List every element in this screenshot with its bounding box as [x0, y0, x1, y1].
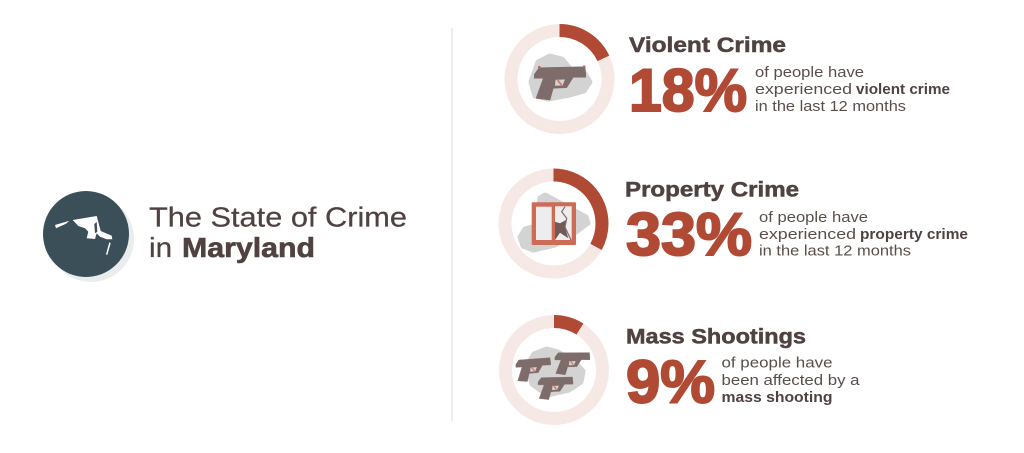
description: mass shooting — [722, 390, 832, 406]
panel: property crime — [505, 175, 968, 272]
description: of people have — [755, 65, 864, 81]
description: of people have — [759, 210, 868, 226]
icon: Maryland map badge — [43, 191, 134, 282]
panel: mass shootings — [506, 322, 861, 418]
icon: three handguns — [516, 349, 590, 400]
description — [722, 356, 861, 406]
donut chart: 9% — [506, 322, 602, 418]
description: in the last 12 months — [755, 99, 906, 115]
panel: title block — [43, 191, 407, 282]
stat: 18%: 18% — [629, 57, 747, 124]
donut chart: 33% — [505, 175, 602, 272]
description: experienced — [759, 227, 856, 243]
icon: handgun — [531, 56, 590, 100]
description: property crime — [860, 227, 968, 243]
heading: in Maryland: Maryland — [182, 232, 315, 263]
description: of people have — [722, 356, 832, 372]
heading: in Maryland: in — [149, 232, 172, 263]
description: been affected by a — [722, 373, 861, 389]
heading: Property Crime: Property Crime — [625, 178, 799, 202]
description — [755, 65, 950, 115]
description: experienced — [755, 82, 852, 98]
heading: The State of Crime: The State of Crime — [149, 202, 407, 232]
heading: Mass Shootings: Mass Shootings — [626, 326, 806, 348]
description: in the last 12 months — [759, 244, 911, 260]
stat: 33%: 33% — [626, 201, 752, 268]
panel: violent crime — [511, 30, 950, 128]
donut chart: 18% — [511, 30, 608, 128]
icon: broken window — [520, 195, 588, 250]
description — [759, 210, 968, 260]
stat: 9%: 9% — [626, 348, 715, 416]
heading: Violent Crime: Violent Crime — [629, 34, 786, 57]
description: violent crime — [856, 82, 950, 98]
